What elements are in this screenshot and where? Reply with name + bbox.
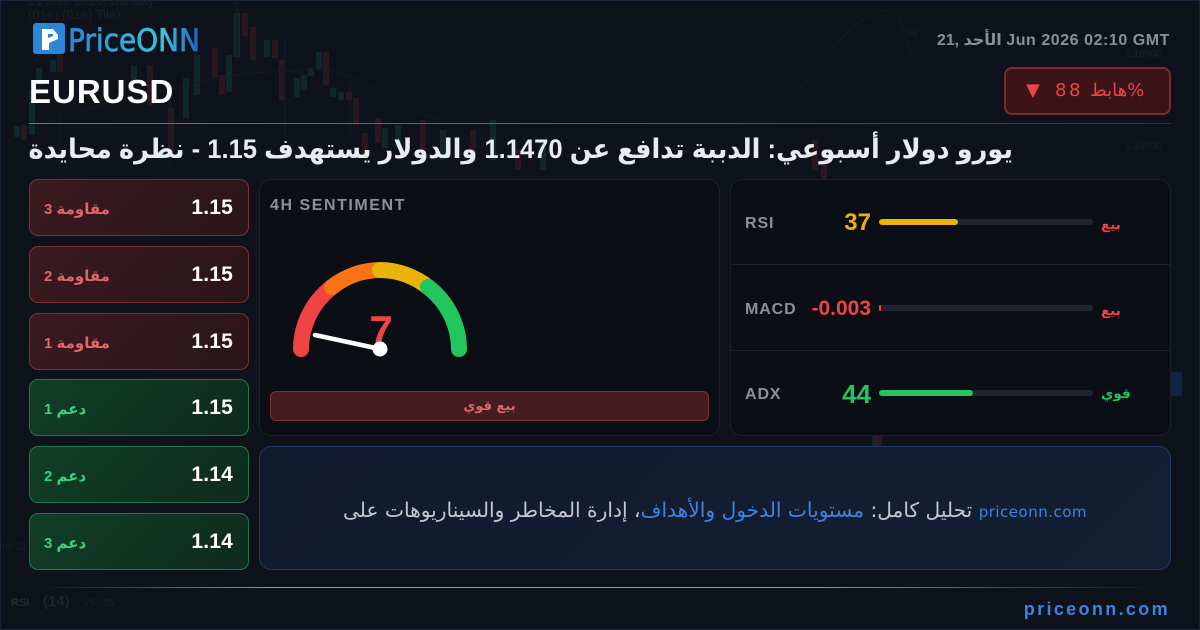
- level: resistance 1: مقاومة 1: [44, 335, 110, 352]
- trend badge: [1004, 67, 1171, 115]
- headline: يورو دولار أسبوعي: الدببة تدافع عن 1.1470 والدولار يستهدف 1.15 - نظرة محايدة: [29, 134, 1013, 164]
- background candlestick chart: 1.16000: [1125, 141, 1162, 152]
- level: resistance 2: 1.15: [191, 263, 233, 286]
- indicator: ADX: ADX: [745, 386, 781, 403]
- background candlestick chart: BB: [906, 28, 918, 38]
- level: support 2: [29, 446, 249, 503]
- trend badge: هابط%: [1090, 80, 1144, 101]
- level: resistance 3: 1.15: [191, 196, 233, 219]
- indicator: MACD: MACD: [745, 301, 797, 318]
- gauge: [293, 262, 467, 357]
- panel: 4H sentiment: [259, 179, 720, 436]
- level: resistance 2: مقاومة 2: [44, 268, 110, 285]
- indicator: RSI: [731, 180, 1170, 265]
- indicator: ADX: [745, 379, 1131, 409]
- indicator: MACD: -0.003: [811, 297, 871, 320]
- gauge: 7: [369, 307, 393, 354]
- call to action panel: [259, 446, 1171, 570]
- indicator: RSI: 37: [844, 209, 871, 236]
- level: resistance 3: مقاومة 3: [44, 201, 110, 218]
- date: 21, الأحد Jun 2026 02:10 GMT: [937, 32, 1170, 49]
- level: resistance 1: 1.15: [191, 330, 233, 353]
- background candlestick chart: (01e) (01e) Tile): [28, 7, 120, 22]
- panel: indicators: [730, 179, 1171, 436]
- call to action text: تحليل كامل: مستويات الدخول والأهداف، إدارة المخاطر والسيناريوهات على priceonn.com: [343, 498, 1087, 522]
- background candlestick chart: 00:22: [2, 542, 27, 553]
- sentiment verdict: بيع قوي: [463, 399, 516, 414]
- footer rule: [40, 587, 1160, 588]
- background candlestick chart: (14): [43, 593, 70, 610]
- footer url: priceonn.com: [1024, 599, 1170, 619]
- background candlestick chart: RSI: [11, 597, 29, 609]
- level: support 3: 1.14: [191, 530, 233, 553]
- indicator: RSI: بيع: [1101, 217, 1121, 233]
- background candlestick chart: 25: [84, 598, 96, 609]
- level: resistance 3: [29, 179, 249, 236]
- pair title: EURUSD: [29, 73, 174, 110]
- trend badge: 88: [1055, 80, 1083, 101]
- level: support 1: 1.15: [191, 396, 233, 419]
- level: support 1: دعم 1: [44, 401, 86, 418]
- background candlestick chart: 1.16500: [1125, 49, 1162, 60]
- level: support 3: [29, 513, 249, 570]
- indicator: ADX: 44: [842, 379, 871, 409]
- level: support 1: [29, 379, 249, 436]
- indicator: RSI: RSI: [745, 215, 774, 232]
- trend badge: ▼: [1026, 80, 1040, 101]
- indicator: MACD: بيع: [1101, 303, 1121, 319]
- sentiment verdict: [270, 391, 709, 421]
- background candlestick chart: 35: [103, 598, 115, 609]
- header rule: [29, 123, 1171, 124]
- indicator: MACD: [731, 265, 1170, 351]
- level: resistance 2: [29, 246, 249, 303]
- level: support 2: 1.14: [191, 463, 233, 486]
- level: support 2: دعم 2: [44, 468, 86, 485]
- indicator: ADX: قوي: [1101, 386, 1131, 402]
- sentiment heading: 4H SENTIMENT: [270, 197, 406, 214]
- level: resistance 1: [29, 313, 249, 370]
- level: support 3: دعم 3: [44, 535, 86, 552]
